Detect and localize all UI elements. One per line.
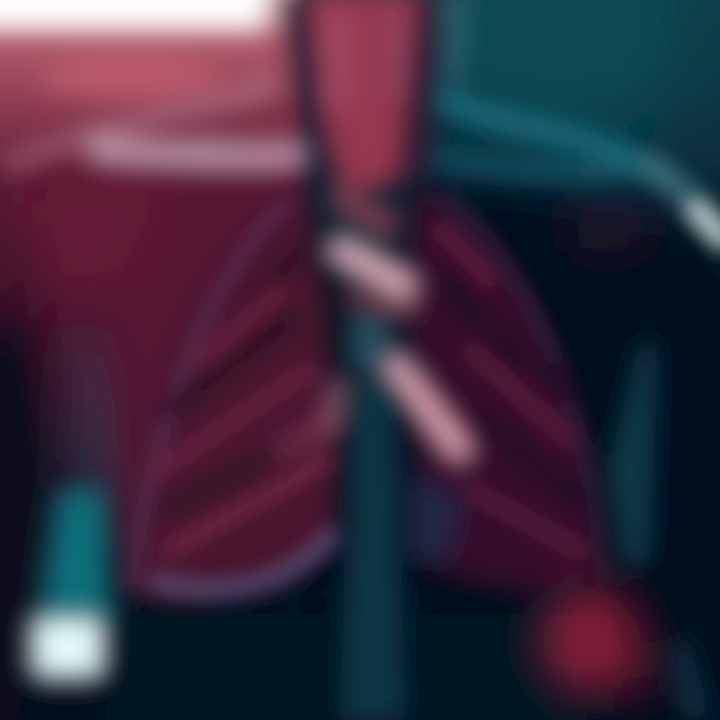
bronchi: bright centre bbox=[280, 200, 460, 450]
sky highlight bbox=[0, 0, 265, 100]
torso: left shoulder and arm bbox=[0, 150, 300, 720]
collarbone left bbox=[10, 85, 295, 165]
hand: lower right red bbox=[540, 585, 667, 700]
collarbone right bbox=[440, 100, 720, 240]
lung: right bbox=[409, 185, 605, 588]
trachea: central teal column bbox=[340, 310, 465, 720]
right arm gap teal bbox=[608, 340, 710, 720]
left arm gap with teal and white window bbox=[32, 330, 120, 678]
lower torso dark bbox=[120, 600, 600, 720]
torso: right shoulder and arm bbox=[420, 170, 720, 720]
lung: left bbox=[125, 180, 335, 598]
neck bbox=[280, 0, 470, 195]
